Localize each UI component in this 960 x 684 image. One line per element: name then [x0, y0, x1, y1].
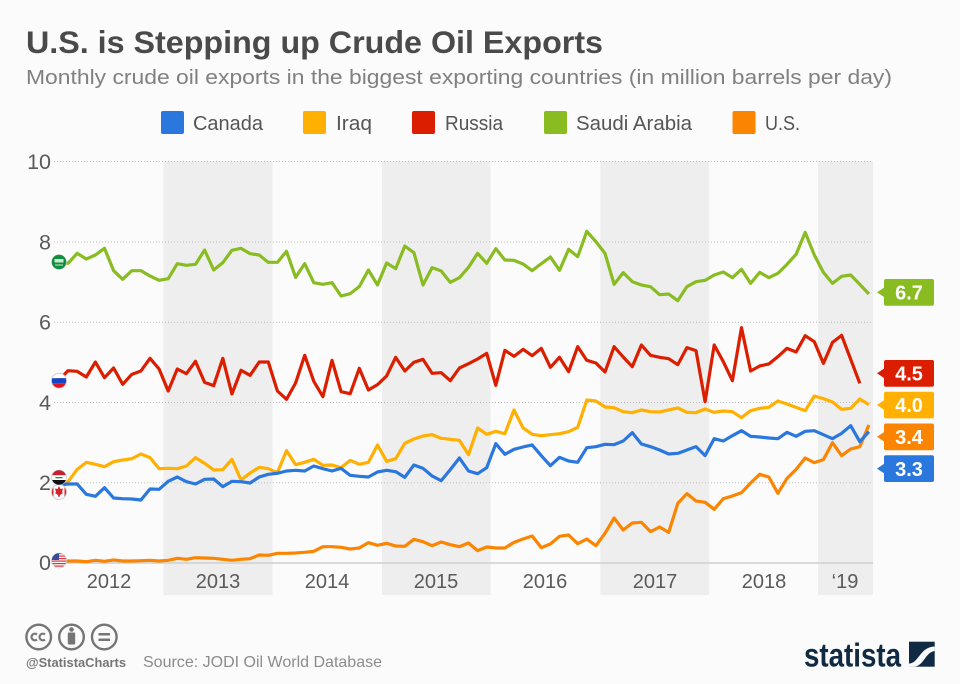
alternating year bands: [164, 161, 873, 595]
value tag: Iraq 4.0: 4.0: [895, 395, 923, 417]
x axis year labels: 2017: [633, 571, 677, 593]
value tag: Canada 3.3: [877, 455, 934, 482]
icon: no derivatives: [92, 625, 117, 649]
icon: statista mark: [909, 642, 935, 667]
statista logo: statista: [804, 637, 902, 674]
value tag: U.S. 3.4: [877, 424, 934, 450]
value tag: Russia 4.5: [877, 360, 934, 387]
legend item: Saudi Arabia: [544, 111, 693, 135]
value tag: Saudi Arabia 6.7: [877, 279, 934, 306]
legend item: U.S.: U.S.: [765, 113, 800, 135]
value tag: Iraq 4.0: [877, 392, 934, 418]
handle: @StatistaCharts: [26, 656, 126, 670]
legend item: Canada: Canada: [193, 113, 264, 135]
legend: [161, 111, 800, 135]
legend item: Russia: [412, 111, 504, 135]
line: Saudi Arabia: [59, 231, 869, 301]
value tag: U.S. 3.4: 3.4: [895, 427, 924, 449]
subtitle: Monthly crude oil exports in the biggest exporting countries (in million barrels per day): [26, 66, 892, 89]
icon: Iraq flag: [51, 470, 67, 486]
x axis year labels: 2015: [414, 571, 458, 593]
value tag: Russia 4.5: 4.5: [895, 364, 923, 386]
line chart: [27, 150, 934, 595]
legend item: Saudi Arabia: Saudi Arabia: [576, 113, 693, 135]
y axis labels: 6: [39, 310, 51, 334]
series lines: [59, 231, 869, 562]
license icons: [26, 625, 117, 649]
legend item: U.S.: [732, 111, 800, 135]
value tag: Canada 3.3: 3.3: [895, 459, 923, 481]
line: Canada: [59, 426, 869, 500]
y axis labels: 2: [39, 471, 51, 495]
icon: Russia flag: [51, 373, 67, 389]
icon: U.S. flag: [51, 553, 67, 569]
legend item: Iraq: Iraq: [336, 113, 372, 135]
x axis year labels: 2018: [742, 571, 786, 593]
x axis year labels: [87, 571, 858, 593]
y axis labels: 10: [27, 150, 51, 174]
title: U.S. is Stepping up Crude Oil Exports: [26, 24, 603, 60]
legend item: Iraq: [303, 111, 372, 135]
y axis labels: [27, 150, 51, 575]
line: U.S.: [59, 425, 869, 562]
icon: attribution: [59, 625, 84, 649]
value tag: Saudi Arabia 6.7: 6.7: [895, 282, 923, 304]
icon: creative commons: [26, 625, 51, 649]
y axis labels: 0: [39, 551, 51, 575]
legend item: Russia: Russia: [445, 113, 504, 135]
x axis year labels: 2013: [196, 571, 240, 593]
x axis year labels: 2016: [523, 571, 567, 593]
x axis year labels: 2012: [87, 571, 131, 593]
line: Russia: [59, 328, 860, 402]
line: Iraq: [59, 396, 869, 485]
x axis year labels: ‘19: [832, 571, 858, 593]
icon: Saudi Arabia flag: [52, 254, 66, 270]
y axis labels: 4: [39, 391, 51, 415]
icon: Canada flag: [51, 484, 67, 500]
x axis year labels: 2014: [305, 571, 349, 593]
y axis labels: 8: [39, 230, 51, 254]
source: Source: JODI Oil World Database: [143, 654, 382, 671]
legend item: Canada: [161, 111, 264, 135]
